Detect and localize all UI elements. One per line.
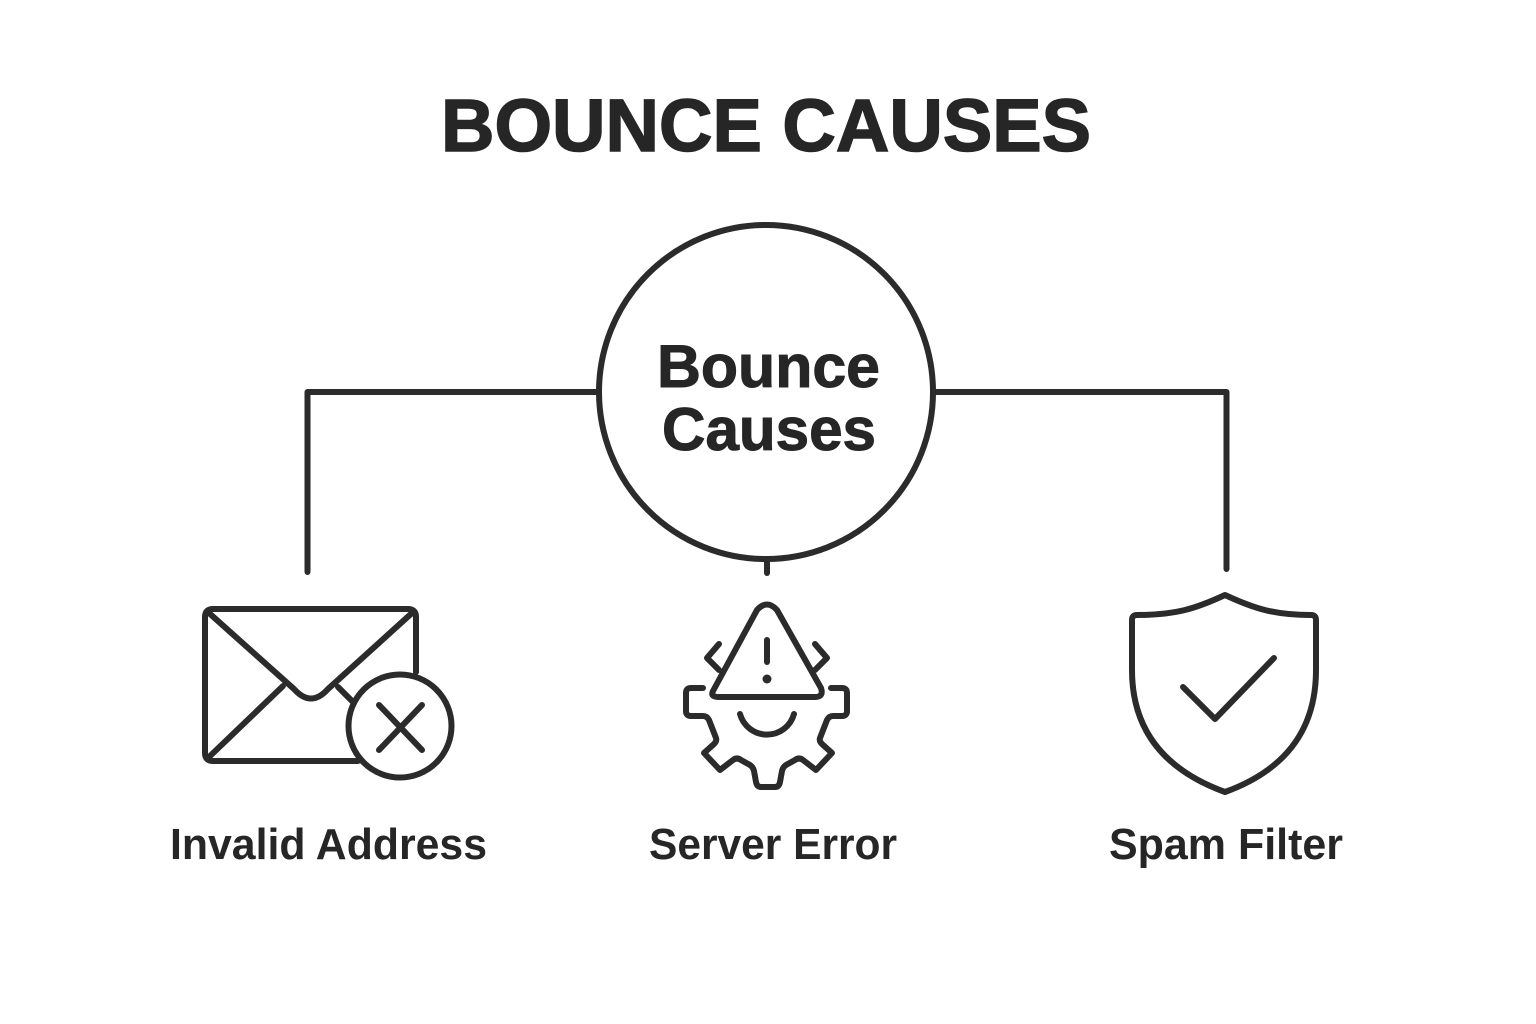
central label: Bounce bbox=[657, 333, 880, 400]
icon: shield with check bbox=[1132, 595, 1316, 792]
connector: center stem bbox=[764, 560, 770, 573]
label: server error: Server Error bbox=[649, 820, 897, 869]
icon: warning triangle over gear bbox=[686, 604, 847, 787]
icon: envelope with x badge bbox=[205, 609, 452, 778]
connector: right branch bbox=[933, 392, 1226, 569]
label: invalid address: Invalid Address bbox=[170, 820, 487, 869]
label: spam filter: Spam Filter bbox=[1109, 820, 1343, 869]
title: BOUNCE CAUSES bbox=[441, 84, 1091, 167]
central label: Causes bbox=[662, 396, 876, 463]
central circle node bbox=[599, 225, 933, 559]
central label bbox=[657, 333, 880, 463]
connector: left branch bbox=[308, 392, 599, 572]
